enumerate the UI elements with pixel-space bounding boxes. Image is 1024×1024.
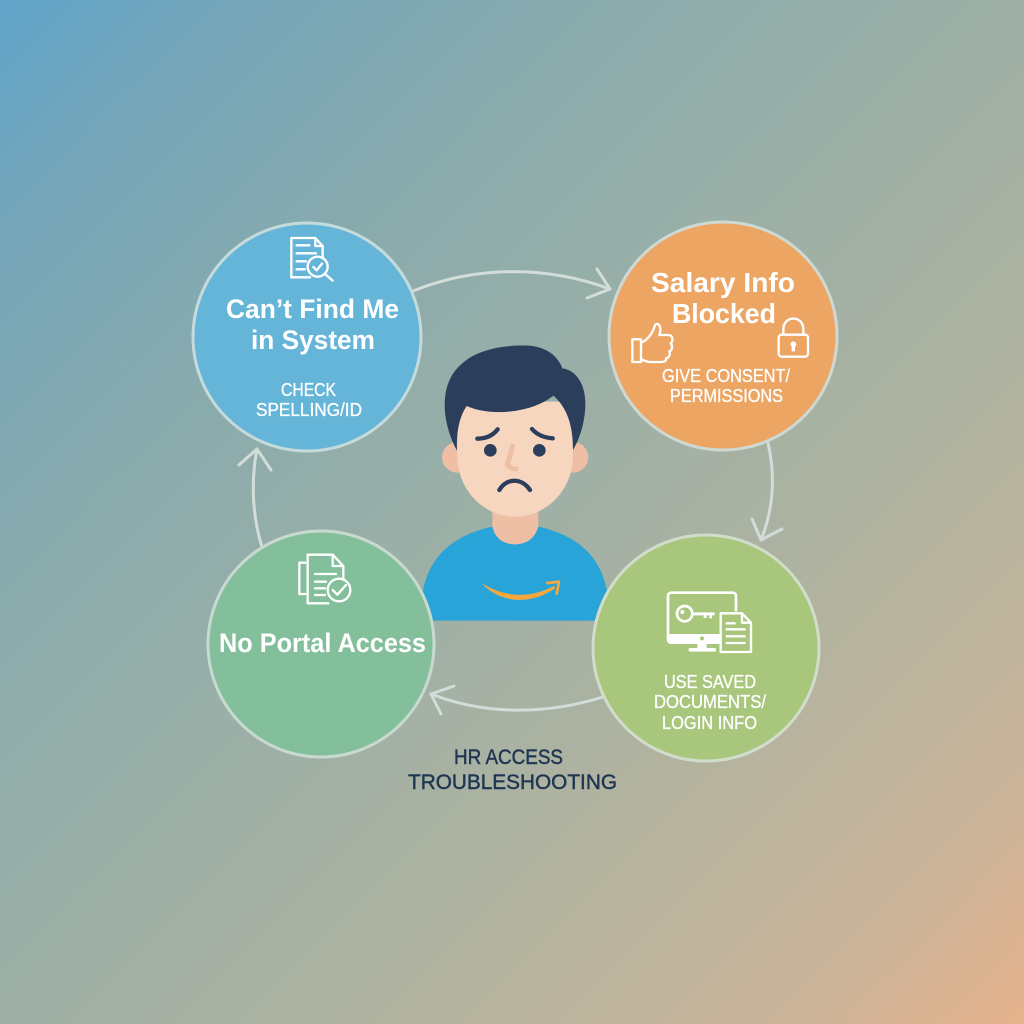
panel: no portal access [208,531,434,757]
icon: monitor, key and document [668,593,751,652]
icon: document with magnifier [291,238,333,281]
eyebrows [477,429,553,439]
tip text: SPELLING/ID [256,400,362,420]
hair [445,346,585,451]
arrow: right, to saved documents [752,443,782,540]
panel: use saved documents [593,535,819,761]
circle [193,223,421,451]
heading [651,267,795,329]
sad mouth [499,481,530,490]
tip text: LOGIN INFO [662,713,757,733]
heading: No Portal Access [219,628,426,658]
panel: can't find me in system [193,223,421,451]
amazon smile [481,582,559,600]
title: HR ACCESS [454,746,563,769]
circle [593,535,819,761]
shirt [420,526,609,621]
circle [208,531,434,757]
title [408,746,617,794]
eyes [484,444,546,457]
ears [442,442,588,473]
circle [609,222,837,450]
face [457,402,573,517]
panel: person [420,346,609,621]
arrow: top, to salary info [413,269,610,298]
heading: Blocked [672,298,776,329]
tip text [662,366,790,406]
icon: documents with check badge [299,555,350,603]
nose [507,446,516,469]
heading: in System [251,325,375,355]
icon: thumbs up [632,324,672,362]
tip text: GIVE CONSENT/ [662,366,790,386]
tip text: PERMISSIONS [670,386,783,406]
tip text: CHECK [281,380,336,400]
panel: salary info blocked [609,222,837,450]
tip text [654,672,766,733]
arrow: left, to find me in system [239,449,271,547]
heading [226,294,399,355]
icon: padlock [779,319,808,357]
heading: Can’t Find Me [226,294,399,324]
title: TROUBLESHOOTING [408,771,617,794]
neck [492,505,538,544]
heading: Salary Info [651,267,795,298]
tip text: USE SAVED [664,672,756,692]
tip text: DOCUMENTS/ [654,692,766,712]
arrow: bottom, to portal access [431,686,603,714]
tip text [256,380,362,420]
